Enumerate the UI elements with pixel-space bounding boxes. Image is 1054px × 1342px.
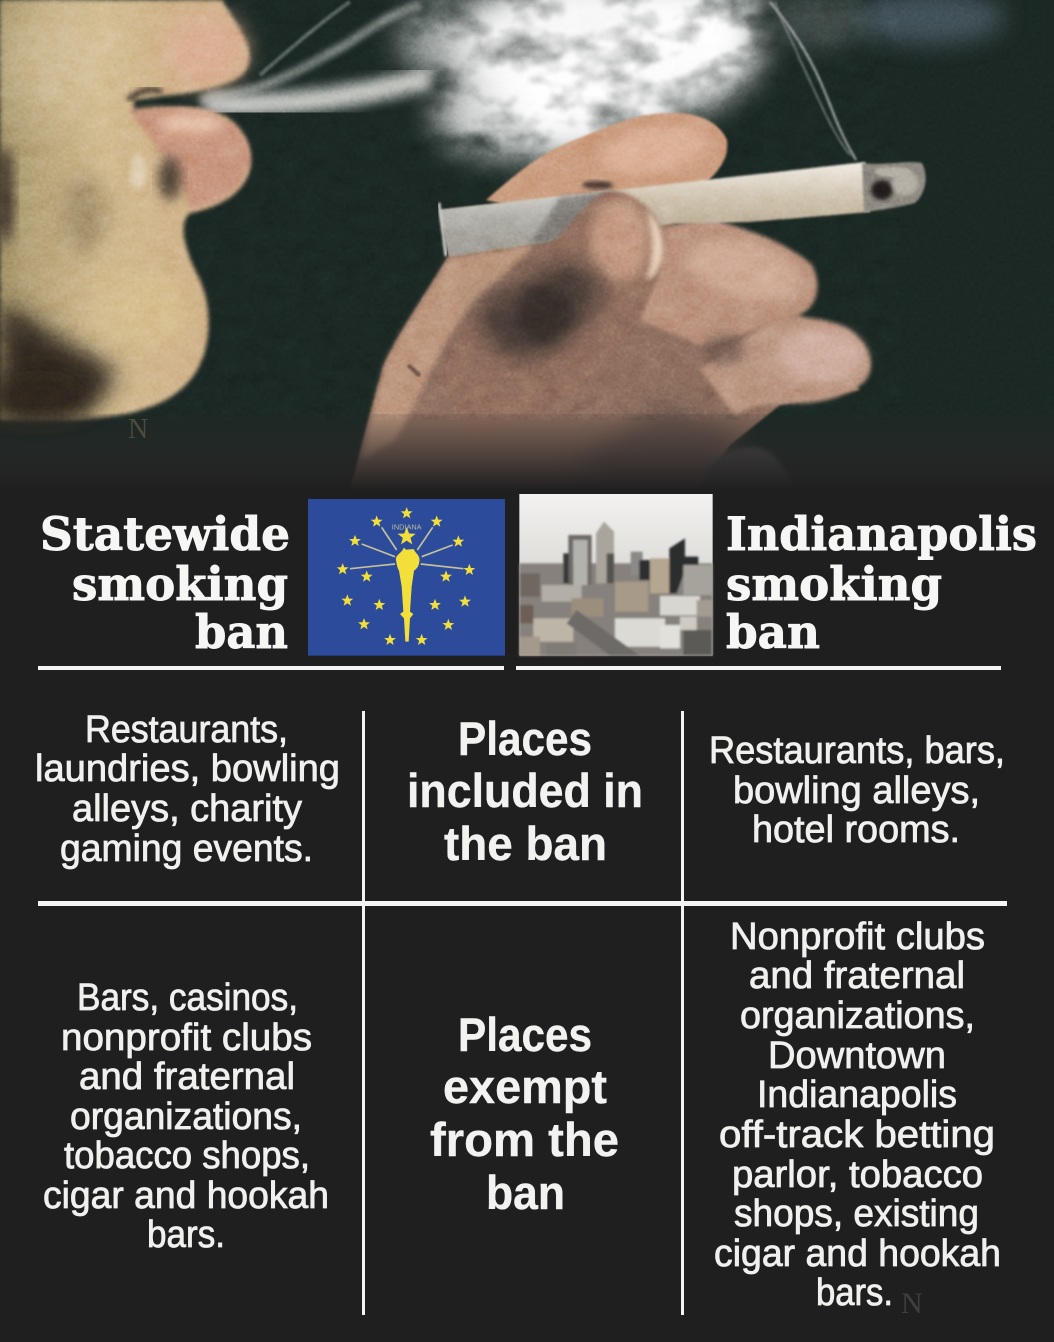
photo: man smoking a cigarette: [0, 0, 1054, 490]
text: Indianapolis places included: [709, 730, 1005, 851]
text: statewide places exempt: and fraternal: [79, 1056, 295, 1098]
icon: Indiana state flag: [308, 499, 505, 656]
text: statewide places included: gaming events.: [60, 828, 313, 870]
text: Indianapolis places exempt: Indianapolis: [757, 1074, 957, 1116]
row heading: places exempt from the ban: exempt: [443, 1060, 607, 1113]
thumb over the cigarette: [462, 188, 665, 372]
photo: Indianapolis skyline: [519, 494, 713, 656]
text: Indianapolis places exempt: Downtown: [768, 1035, 946, 1077]
palm and back of hand: [353, 222, 860, 483]
text: statewide places exempt: organizations,: [70, 1096, 302, 1138]
text: statewide places exempt: nonprofit clubs: [61, 1017, 312, 1059]
icon: Indiana state flag: INDIANA: [392, 522, 422, 531]
row heading: places included in the ban: the ban: [444, 817, 607, 870]
index finger: [485, 112, 729, 204]
watermark N: N: [901, 1287, 923, 1320]
text: statewide places exempt: Bars, casinos,: [77, 977, 298, 1019]
heading: Indianapolis smoking ban: [726, 507, 1037, 659]
text: statewide places included: laundries, bowling: [35, 748, 340, 790]
text: Indianapolis places exempt: [714, 916, 1001, 1314]
text: Indianapolis places exempt: off-track betting: [719, 1114, 995, 1156]
heading: Indianapolis smoking ban: smoking: [726, 557, 942, 611]
table rules: [38, 666, 1007, 1315]
text: statewide places included: [35, 709, 340, 870]
heading: Indianapolis smoking ban: ban: [726, 605, 820, 659]
text: Indianapolis places included: bowling alleys,: [733, 770, 980, 812]
row heading: places exempt from the ban: ban: [486, 1166, 565, 1219]
ring finger: [700, 317, 871, 415]
text: Indianapolis places exempt: cigar and hookah: [714, 1233, 1001, 1275]
text: Indianapolis places exempt: organizations,: [740, 995, 975, 1037]
left edge light: [362, 245, 535, 460]
text: statewide places exempt: bars.: [147, 1214, 225, 1256]
row heading: places included in the ban: [407, 712, 643, 870]
cigarette: [439, 162, 926, 256]
text: statewide places included: alleys, charity: [72, 788, 302, 830]
text: Indianapolis places included: Restaurants, bars,: [709, 730, 1005, 772]
photo fade to black: [0, 414, 1054, 490]
watermark N: N: [128, 414, 148, 445]
text: statewide places exempt: [43, 977, 329, 1256]
text: Indianapolis places exempt: shops, existing: [734, 1193, 979, 1235]
lower fingertip: [728, 446, 782, 474]
text: statewide places exempt: cigar and hookah: [43, 1175, 329, 1217]
text: Indianapolis places exempt: bars.: [816, 1272, 893, 1314]
smoke cloud: [200, 0, 1005, 165]
text: Indianapolis places exempt: and fraternal: [749, 955, 965, 997]
text: statewide places exempt: tobacco shops,: [64, 1135, 310, 1177]
heading: statewide smoking ban: [40, 507, 290, 659]
heading: statewide smoking ban: Statewide: [40, 507, 290, 561]
hand: [350, 113, 871, 490]
face: [0, 0, 250, 420]
creases: [705, 334, 745, 366]
row heading: places included in the ban: included in: [407, 764, 643, 817]
text: Indianapolis places included: hotel rooms.: [752, 809, 960, 851]
row heading: places exempt from the ban: Places: [458, 1008, 592, 1061]
text: Indianapolis places exempt: parlor, tobacco: [732, 1154, 983, 1196]
photo grain: [0, 0, 1054, 420]
row heading: places exempt from the ban: [430, 1008, 619, 1219]
heading: statewide smoking ban: ban: [195, 605, 288, 659]
row heading: places included in the ban: Places: [458, 712, 592, 765]
middle finger: [640, 220, 817, 345]
heading: statewide smoking ban: smoking: [72, 557, 288, 611]
heading: Indianapolis smoking ban: Indianapolis: [726, 507, 1037, 561]
text: Indianapolis places exempt: Nonprofit clubs: [730, 916, 985, 958]
row heading: places exempt from the ban: from the: [430, 1113, 619, 1166]
text: statewide places included: Restaurants,: [85, 709, 288, 751]
